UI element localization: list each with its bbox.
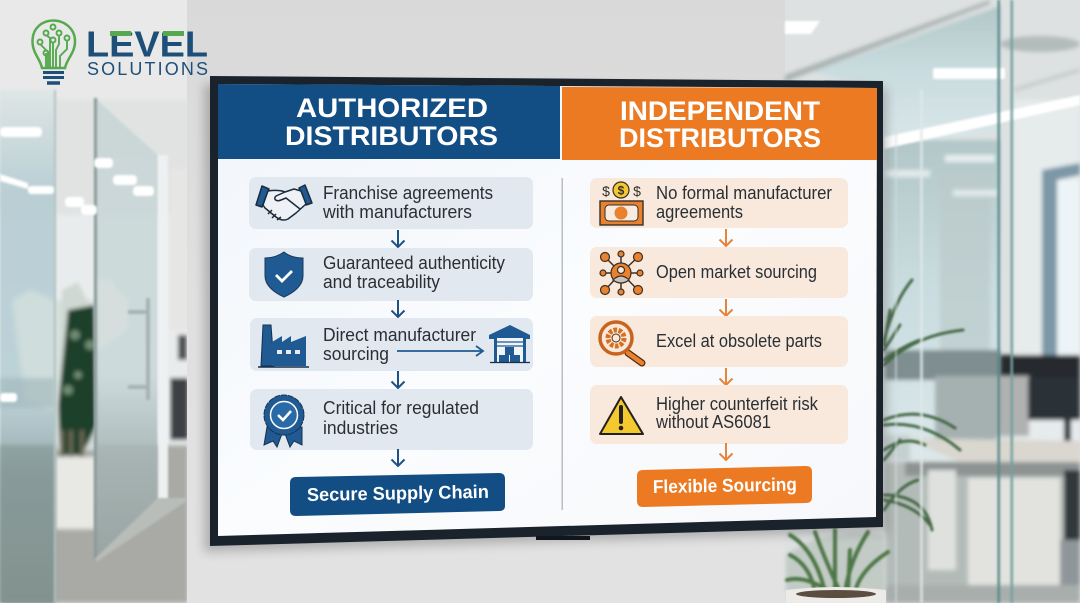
arrow: down 3: [392, 371, 404, 388]
arrow: down 4: [392, 449, 404, 466]
row: franchise agreements: with manufacturers: [322, 202, 472, 222]
icon: warehouse: [489, 325, 530, 363]
row: direct manufacturer sourcing: sourcing: [323, 344, 389, 364]
panel: independent distributors: [562, 87, 877, 507]
arrow: down 1: [720, 229, 732, 246]
outcome: secure supply chain: [290, 473, 505, 516]
row: no formal agreements: [590, 178, 848, 228]
arrow: down 3: [720, 368, 732, 385]
wordmark: SOLUTIONS: SOLUTIONS: [87, 59, 208, 79]
icon: magnifier gear: [600, 322, 642, 363]
row: open market: Open market sourcing: [656, 262, 817, 282]
heading band: independent: DISTRIBUTORS: [619, 123, 821, 153]
monitor frame: [210, 76, 883, 546]
row: direct manufacturer sourcing: Direct manufacturer: [323, 325, 476, 345]
background: left office: [0, 0, 188, 603]
row: guaranteed authenticity: and traceability: [323, 272, 440, 292]
heading band: independent: [562, 87, 877, 160]
icon: factory: [258, 325, 309, 367]
row: counterfeit risk: [590, 385, 848, 444]
heading band: authorized: AUTHORIZED: [296, 93, 488, 123]
row: critical for regulated: industries: [323, 418, 398, 438]
icon: network: [600, 251, 643, 295]
icon: money: $: [633, 183, 641, 199]
row: franchise agreements: [249, 177, 533, 229]
panel: authorized distributors: [218, 84, 560, 516]
row: guaranteed authenticity: Guaranteed authenticity: [323, 253, 505, 273]
row: counterfeit risk: without AS6081: [655, 412, 771, 432]
row: critical for regulated: Critical for regulated: [323, 398, 479, 418]
icon: rosette badge: [264, 395, 304, 447]
row: no formal agreements: agreements: [656, 202, 743, 222]
row: open market: [590, 247, 848, 298]
arrow: down 2: [720, 299, 732, 316]
divider: [562, 178, 563, 510]
outcome: flexible sourcing: Flexible Sourcing: [653, 473, 797, 497]
arrow: down 1: [392, 230, 404, 247]
background: center wall: [187, 0, 785, 603]
row: counterfeit risk: Higher counterfeit risk: [656, 394, 819, 414]
row: franchise agreements: Franchise agreements: [323, 183, 493, 203]
icon: money: $: [618, 184, 625, 198]
glass mullions: [895, 0, 1013, 603]
outcome: flexible sourcing: [637, 466, 812, 507]
background: right office: [785, 0, 1080, 603]
arrow: down 2: [392, 300, 404, 317]
icon: circuit light bulb: [32, 20, 75, 83]
wordmark: LEVEL: LEVEL: [86, 24, 208, 64]
screen: [218, 84, 877, 536]
outcome: secure supply chain: Secure Supply Chain: [307, 481, 489, 505]
row: no formal agreements: No formal manufacturer: [656, 183, 832, 203]
icon: shield check: [265, 252, 303, 297]
row: obsolete parts: Excel at obsolete parts: [656, 331, 822, 351]
heading band: authorized: DISTRIBUTORS: [285, 121, 498, 151]
light strip: [884, 95, 1080, 149]
icon: handshake: [256, 185, 312, 220]
office rear: [885, 350, 1000, 380]
stand notch: [536, 536, 590, 540]
accent: green bars on E: [110, 30, 185, 36]
heading band: authorized: [218, 84, 560, 159]
heading band: independent: INDEPENDENT: [620, 96, 821, 126]
row: direct manufacturer sourcing: [250, 318, 533, 371]
icon: money: $: [602, 183, 610, 199]
arrow: down 4: [720, 443, 732, 460]
icon: warning triangle: [600, 397, 643, 434]
icon: money: [600, 182, 643, 225]
logo: Level Solutions: [32, 20, 208, 83]
row: critical for regulated: [250, 389, 533, 450]
plants: [884, 280, 963, 530]
arrow: factory to warehouse: [397, 346, 483, 356]
monitor shadow: [204, 84, 887, 552]
row: obsolete parts: [590, 316, 848, 367]
row: guaranteed authenticity: [249, 248, 533, 301]
